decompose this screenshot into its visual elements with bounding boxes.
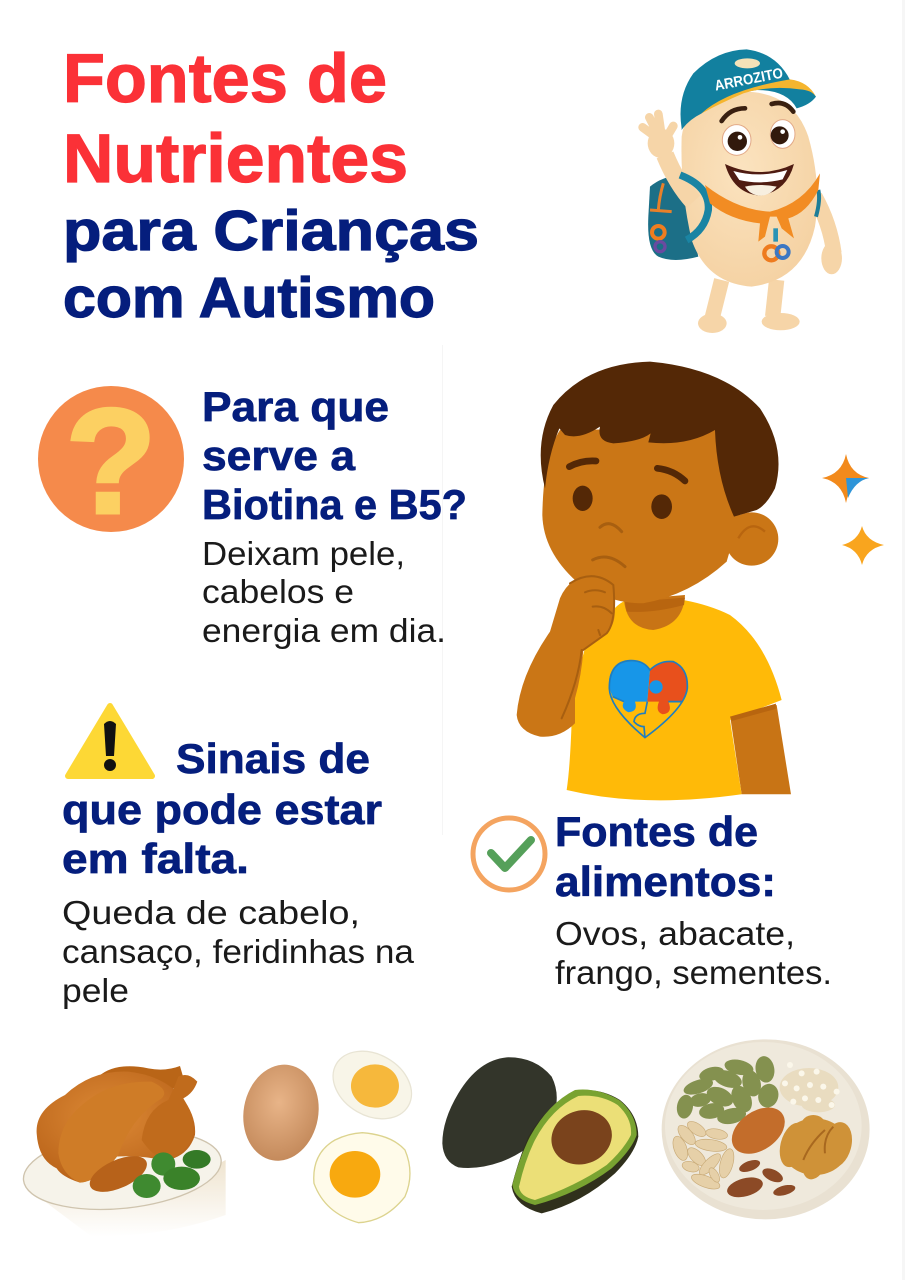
heading: para que serve: Para que — [202, 383, 389, 430]
title: para Crianças — [63, 199, 479, 263]
icon: mascot Arrozito — [643, 49, 842, 333]
heading: fontes de alimentos — [555, 808, 776, 905]
image: roast chicken — [20, 1066, 226, 1237]
text: alimentos description: Ovos, abacate, — [555, 915, 795, 952]
title: Nutrientes — [63, 120, 408, 197]
heading: para que serve: serve a — [202, 432, 356, 479]
heading: fontes de alimentos: Fontes de — [555, 808, 758, 855]
icon: check circle — [473, 818, 545, 890]
image: eggs — [236, 1038, 424, 1223]
text: biotina description: energia em dia. — [202, 612, 446, 649]
text: biotina description: cabelos e — [202, 573, 354, 610]
icon: question mark circle — [38, 377, 184, 545]
text: alimentos description: frango, sementes. — [555, 954, 832, 991]
heading: sinais: em falta. — [62, 835, 249, 882]
text: sinais description: pele — [62, 972, 129, 1009]
title: Fontes de — [63, 40, 387, 117]
heading: sinais: que pode estar — [62, 786, 382, 833]
heading: sinais: Sinais de — [176, 735, 370, 782]
icon: question mark circle: ? — [65, 377, 157, 545]
text: biotina description — [202, 535, 446, 649]
heading: para que serve — [202, 383, 467, 528]
heading: para que serve: Biotina e B5? — [202, 481, 467, 528]
heading: fontes de alimentos: alimentos: — [555, 858, 776, 905]
title: com Autismo — [63, 266, 435, 330]
text: sinais description: cansaço, feridinhas na — [62, 933, 415, 970]
icon: sparkles — [822, 454, 884, 565]
icon: warning triangle — [68, 706, 152, 776]
icon: puzzle heart — [609, 661, 687, 738]
icon: mascot Arrozito: ARROZITO — [713, 66, 784, 95]
text: biotina description: Deixam pele, — [202, 535, 405, 572]
text: sinais description: Queda de cabelo, — [62, 894, 360, 931]
image: avocado — [442, 1057, 638, 1213]
heading: sinais — [62, 735, 382, 882]
text: sinais description — [62, 894, 415, 1009]
text: alimentos description — [555, 915, 832, 991]
title — [63, 40, 479, 330]
image: nuts and seeds plate — [662, 1039, 870, 1219]
illustration: thinking boy — [517, 362, 791, 800]
